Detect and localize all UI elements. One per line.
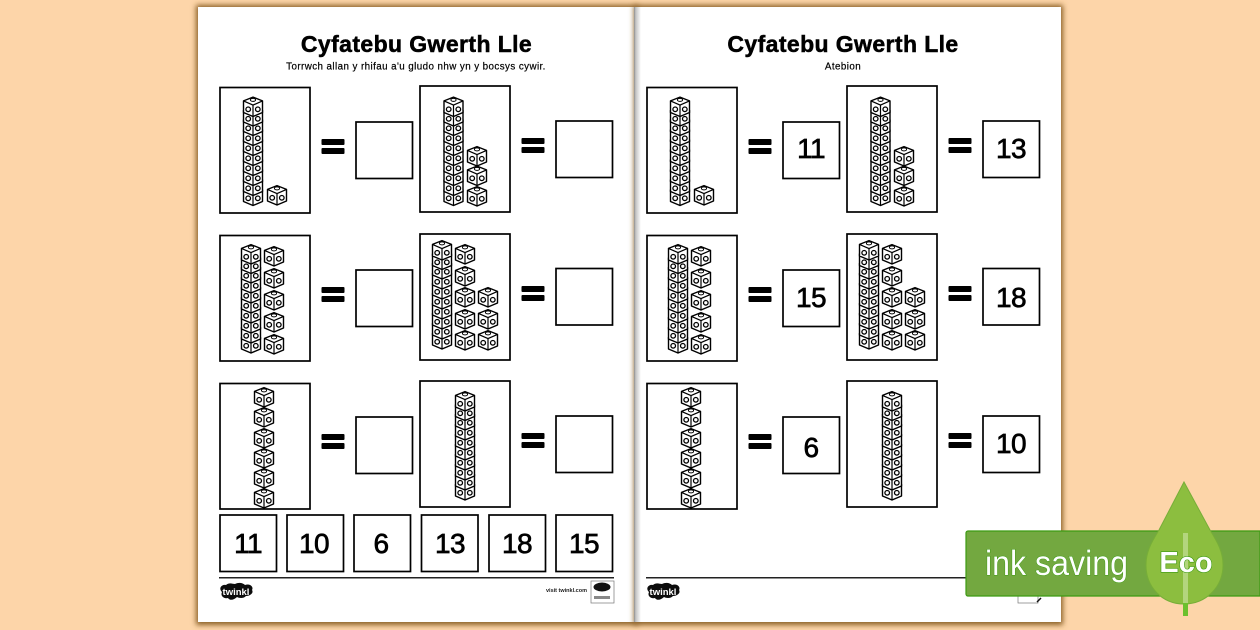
answer box	[356, 270, 412, 326]
equals sign	[522, 433, 544, 448]
card 11	[220, 515, 276, 572]
ink saving eco banner	[966, 482, 1260, 616]
card 18	[489, 515, 546, 572]
eco label: Eco	[1159, 547, 1213, 579]
answer 11: 11	[797, 133, 825, 164]
equals sign	[748, 434, 772, 449]
card 6	[354, 515, 410, 572]
equals sign	[322, 434, 344, 449]
answer 18: 18	[996, 282, 1026, 313]
card 13	[422, 515, 478, 572]
answer box	[356, 417, 412, 474]
answer 6	[783, 417, 840, 474]
badge	[591, 581, 614, 603]
card 6: 6	[374, 528, 389, 559]
row 3 left picture box	[220, 384, 310, 509]
row 3 right picture box	[847, 381, 937, 507]
row 2 left picture box	[220, 236, 310, 361]
answer box	[356, 122, 412, 178]
panel: worksheet page	[196, 5, 638, 625]
row 1 right picture box	[420, 86, 510, 212]
answer box	[556, 416, 612, 472]
banner text: ink saving	[985, 544, 1128, 583]
answer 13: 13	[996, 133, 1026, 164]
equals sign	[748, 287, 772, 302]
website: visit twinkl.com	[546, 588, 587, 594]
answer 13	[983, 121, 1040, 178]
row 1 right picture box	[847, 86, 937, 212]
card 10	[287, 515, 344, 572]
equals sign	[948, 286, 972, 301]
answer 15: 15	[796, 282, 826, 313]
title: Cyfatebu Gwerth Lle	[727, 31, 959, 57]
row 2 right picture box	[420, 234, 510, 360]
answer 10	[983, 416, 1040, 472]
equals sign	[748, 139, 772, 154]
row 3 right picture box	[420, 381, 510, 507]
row 2 right picture box	[847, 234, 937, 360]
twinkl logo: twinkl	[223, 587, 249, 598]
row 3 left picture box	[647, 384, 737, 509]
equals sign	[322, 287, 344, 302]
answer 15	[783, 270, 840, 326]
answer box	[556, 121, 612, 178]
twinkl logo: twinkl	[650, 587, 676, 598]
instructions: Torrwch allan y rhifau a'u gludo nhw yn y bocsys cywir.	[286, 62, 546, 72]
twinkl logo	[220, 583, 253, 600]
answer 11	[783, 122, 840, 178]
banner bar	[966, 531, 1260, 596]
icon: eco drop	[1146, 482, 1223, 616]
panel: answers page	[634, 5, 1063, 625]
number cards	[220, 515, 612, 572]
subtitle: Atebion	[825, 62, 861, 72]
card 15	[556, 515, 612, 572]
title: Cyfatebu Gwerth Lle	[301, 31, 532, 57]
answer box	[556, 268, 612, 325]
row 1 left picture box	[647, 88, 737, 213]
card 10: 10	[299, 528, 329, 559]
card 11: 11	[234, 528, 262, 559]
equals sign	[522, 138, 544, 153]
card 15: 15	[569, 528, 599, 559]
card 13: 13	[435, 528, 465, 559]
equals sign	[948, 138, 972, 153]
card 18: 18	[502, 528, 532, 559]
equals sign	[522, 286, 544, 301]
answer 6: 6	[804, 432, 819, 463]
row 1 left picture box	[220, 88, 310, 213]
badge	[1018, 596, 1041, 603]
answer 10: 10	[996, 428, 1026, 459]
answer 18	[983, 268, 1040, 325]
twinkl logo	[647, 583, 680, 600]
equals sign	[948, 433, 972, 448]
row 2 left picture box	[647, 236, 737, 361]
equals sign	[322, 139, 344, 154]
